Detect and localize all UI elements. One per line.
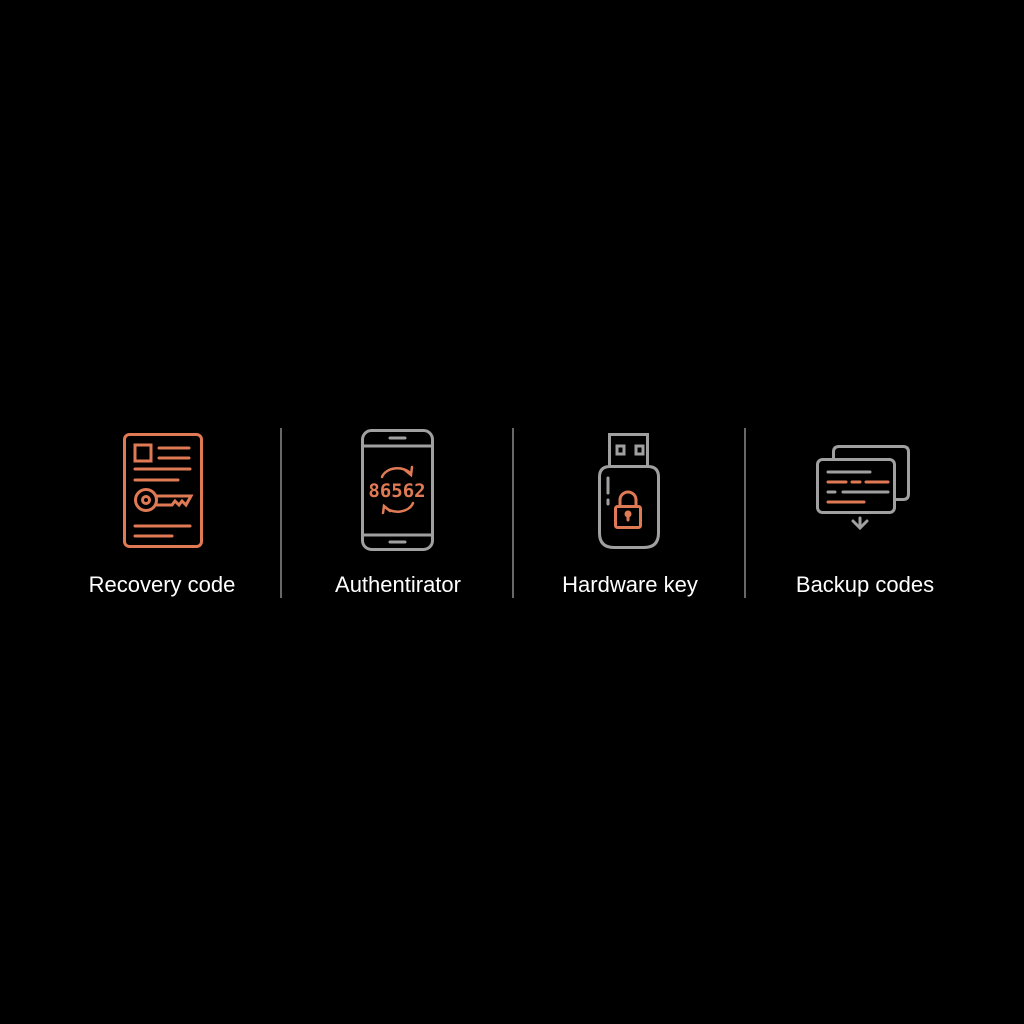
icon: recovery code document with key: [124, 434, 202, 546]
label: backup codes: Backup codes: [796, 572, 934, 597]
icon: authenticator phone: 86562: [368, 480, 426, 502]
label: recovery code: Recovery code: [89, 572, 235, 597]
icon: backup codes cards: [818, 446, 908, 528]
icon: authenticator phone: [362, 430, 432, 550]
icon: hardware key usb: [600, 434, 658, 548]
label: hardware key: Hardware key: [562, 572, 698, 597]
label: authenticator: Authentirator: [335, 572, 461, 597]
